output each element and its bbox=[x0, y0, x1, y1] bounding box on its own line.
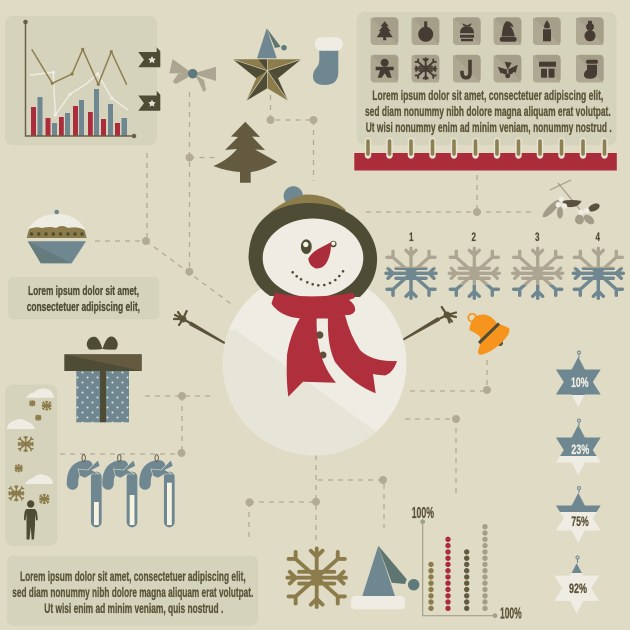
icon tile: pudding bbox=[453, 17, 481, 45]
buttons bbox=[316, 331, 326, 358]
gauge 4: 4 bbox=[596, 230, 600, 244]
icon: christmas tree bbox=[213, 122, 277, 183]
panel: bottom text: sed diam nonummy nibh dolore magna aliquam erat volutpat. bbox=[12, 585, 253, 600]
dashed connector network bbox=[60, 92, 533, 545]
panel: ornament icons and text bbox=[357, 12, 617, 145]
head bbox=[263, 218, 363, 298]
column 2 bbox=[445, 537, 451, 611]
snowman bbox=[174, 186, 456, 470]
column 4 bbox=[482, 524, 488, 611]
eyes bbox=[301, 239, 337, 254]
brown line series bbox=[32, 48, 127, 86]
axis labels: 100% bbox=[500, 606, 522, 622]
star ornament 23%: 23% bbox=[571, 441, 590, 457]
clouds bbox=[7, 388, 54, 484]
icon tile: bauble bbox=[412, 17, 439, 45]
icon: bell bbox=[468, 314, 509, 355]
icon: stocking bbox=[313, 37, 343, 85]
bar chart bbox=[31, 89, 127, 136]
gauge 4 bbox=[573, 230, 623, 298]
icon: gift box bbox=[64, 336, 142, 422]
star ornament 23% bbox=[556, 419, 601, 475]
icon tile: tree bbox=[371, 17, 398, 45]
candy cane gauges bbox=[72, 454, 173, 525]
gauge 1 bbox=[386, 230, 436, 298]
cane 3 bbox=[145, 454, 173, 525]
hat pompom bbox=[284, 186, 303, 206]
axes bbox=[420, 519, 497, 618]
smile bbox=[291, 270, 344, 287]
dot column chart bbox=[412, 505, 522, 622]
panel: bottom text bbox=[7, 556, 258, 626]
icon: large snowflake bbox=[287, 548, 346, 607]
icon tile: gingerbread bbox=[371, 55, 398, 82]
icon tile: gift bbox=[533, 55, 561, 82]
icon tile: candy cane bbox=[453, 55, 481, 82]
snowman body bbox=[222, 288, 406, 456]
legend flag two bbox=[138, 91, 160, 111]
star ornament 75% bbox=[556, 486, 601, 543]
icon grid bbox=[371, 17, 604, 82]
snowflake gauges bbox=[386, 230, 623, 298]
icon: santa hat bbox=[351, 546, 419, 609]
panel: bottom text: Lorem ipsum dolor sit amet, consectetuer adipiscing elit, bbox=[20, 569, 246, 584]
icon: cupcake bbox=[27, 210, 87, 263]
icon tile: snowflake bbox=[412, 55, 439, 82]
panel: short text: Lorem ipsum dolor sit amet, bbox=[28, 283, 139, 298]
column 1 bbox=[428, 562, 434, 611]
cane 2 bbox=[108, 454, 136, 525]
icon tile: holly bbox=[494, 55, 521, 82]
chart axes bbox=[23, 20, 136, 138]
star ornament 10%: 10% bbox=[571, 374, 589, 390]
panel: short text bbox=[8, 277, 159, 320]
gauge 2: 2 bbox=[472, 230, 476, 244]
snowman arms bbox=[174, 307, 456, 349]
cane 1 bbox=[72, 454, 100, 525]
star ornament 10% bbox=[556, 351, 601, 407]
icon tile: snowman bbox=[576, 17, 604, 45]
legend flag one bbox=[138, 47, 160, 67]
person bbox=[24, 500, 38, 540]
small snowflakes bbox=[9, 401, 51, 504]
icon tile: santa hat bbox=[494, 17, 521, 45]
icon: star with hat bbox=[233, 28, 301, 101]
text block bbox=[365, 88, 612, 135]
gauge 1: 1 bbox=[409, 230, 414, 244]
gauge 3: 3 bbox=[535, 230, 540, 244]
star ornament 92%: 92% bbox=[569, 580, 587, 596]
star ornament 92% bbox=[554, 556, 599, 613]
panel: snowfall scene bbox=[5, 384, 58, 546]
hat bbox=[248, 194, 377, 297]
icon: bow bbox=[169, 59, 216, 92]
icon tile: candle bbox=[533, 17, 561, 45]
panel: bottom text: Ut wisi enim ad minim veniam, quis nostrud . bbox=[44, 601, 223, 616]
axis labels: 100% bbox=[412, 505, 434, 522]
panel: short text: consectetuer adipiscing elit, bbox=[27, 299, 140, 314]
scarf bbox=[272, 293, 397, 397]
column 3 bbox=[464, 549, 469, 611]
icon tile: stocking bbox=[576, 55, 604, 82]
white line series bbox=[30, 71, 128, 117]
panel: combined bar and line chart bbox=[5, 16, 157, 145]
calendar binding bar bbox=[354, 141, 617, 170]
nose bbox=[308, 242, 331, 269]
gauge 3 bbox=[513, 230, 563, 298]
icon: mistletoe bbox=[541, 180, 601, 226]
gauge 2 bbox=[449, 230, 499, 298]
star ornament 75%: 75% bbox=[571, 513, 589, 529]
axis labels bbox=[412, 505, 522, 622]
